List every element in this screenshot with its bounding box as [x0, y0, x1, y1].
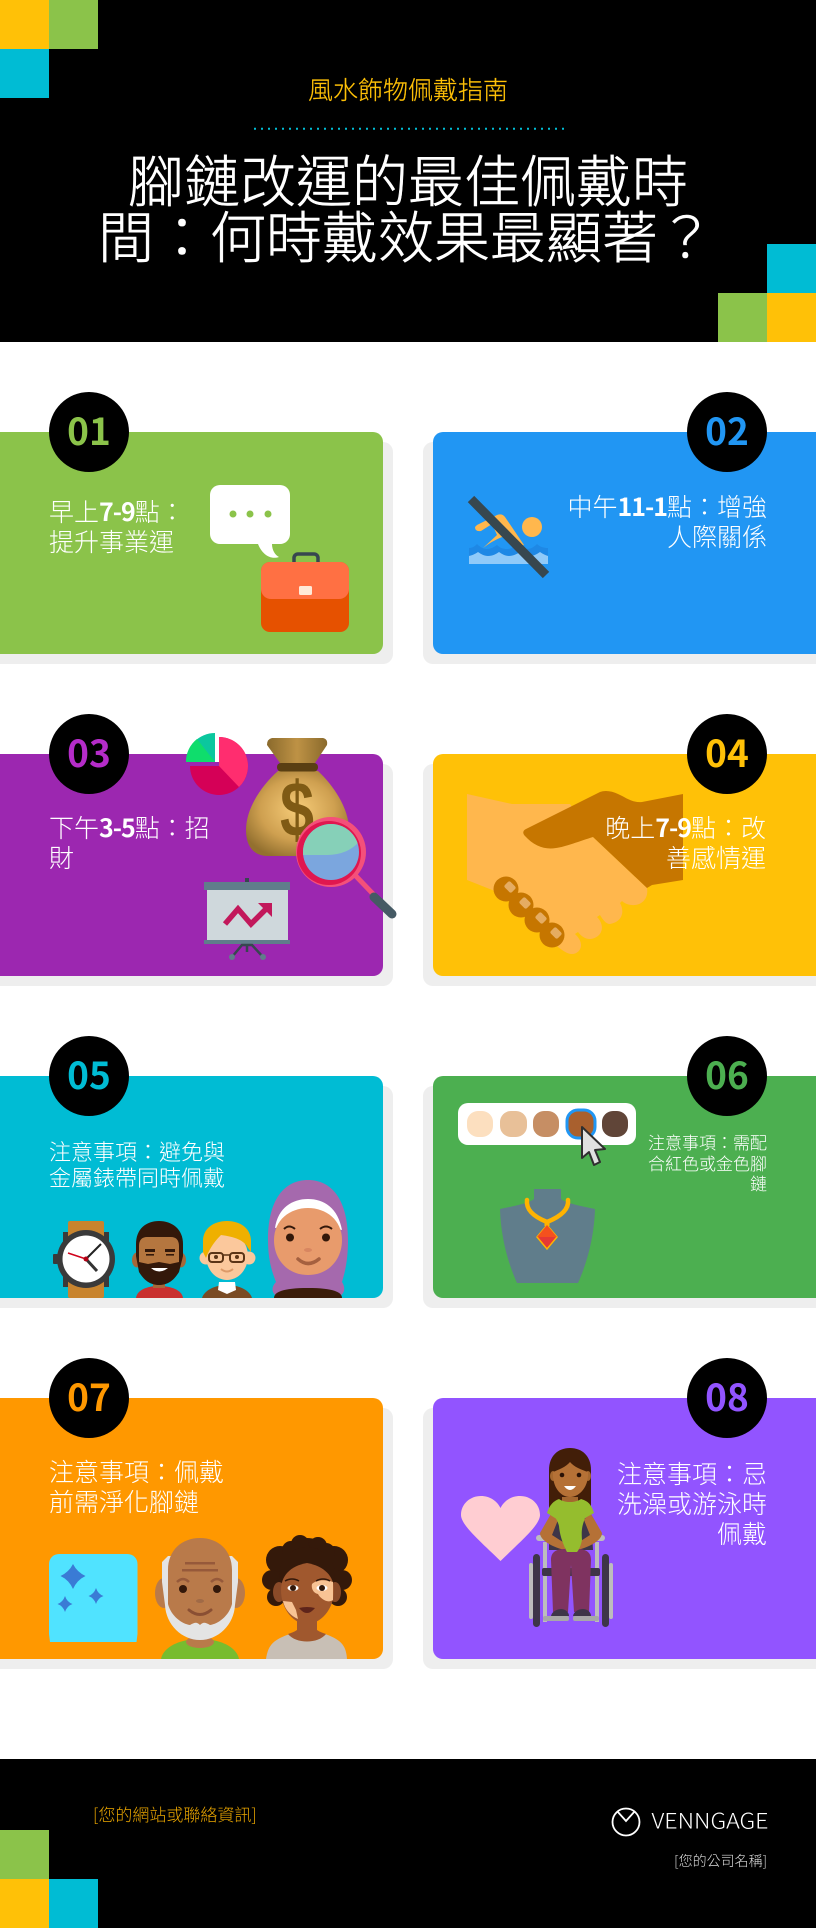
icon: woman in wheelchair: [529, 1448, 613, 1627]
text 06: 注意事項：需配: [648, 1129, 767, 1154]
text 02: [567, 488, 767, 554]
title: 間：何時戴效果最顯著？: [98, 194, 714, 275]
number 07: 07: [67, 1368, 111, 1422]
number 05: 05: [67, 1046, 111, 1100]
text 08: 注意事項：忌: [617, 1455, 767, 1491]
number 08: [687, 1358, 767, 1438]
icon: blond woman: [200, 1221, 256, 1298]
icon: watch: [53, 1221, 115, 1298]
title: [98, 138, 714, 275]
text 04: 晚上7-9點：改: [605, 809, 766, 845]
icon: heart: [461, 1496, 540, 1561]
text 05: [49, 1135, 225, 1193]
icon: necklace on bust: [500, 1189, 595, 1283]
icon: money bag: $: [280, 765, 314, 853]
text 04: 善感情運: [666, 839, 766, 875]
panel 08: [423, 1358, 816, 1669]
text 02: 中午11-1點：增強: [567, 488, 767, 524]
text 07: [49, 1453, 224, 1519]
text 08: 洗澡或游泳時: [617, 1485, 767, 1521]
text 06: [648, 1129, 767, 1195]
panel 02: [423, 392, 816, 664]
number 02: [687, 392, 767, 472]
icon: no swimming: [469, 499, 548, 575]
number 04: 04: [705, 724, 749, 778]
panel 03: [0, 714, 393, 986]
icon: handshake: [467, 791, 683, 954]
icon: cursor: [582, 1127, 605, 1165]
text 07: 前需淨化腳鏈: [49, 1483, 199, 1519]
number 04: [687, 714, 767, 794]
icon: briefcase: [261, 554, 349, 632]
subtitle: 風水飾物佩戴指南: [308, 71, 508, 107]
panel 07: [0, 1358, 393, 1669]
icon: bearded man: [132, 1221, 186, 1298]
icon: elderly man: [155, 1538, 245, 1659]
text 01: [49, 493, 185, 559]
text 07: 注意事項：佩戴: [49, 1453, 224, 1489]
footer contact text: [您的網站或聯絡資訊]: [93, 1801, 257, 1826]
number 06: [687, 1036, 767, 1116]
icon: magnifying glass: [296, 817, 392, 914]
number 05: [49, 1036, 129, 1116]
text 01: 早上7-9點：: [49, 493, 185, 529]
company name: [您的公司名稱]: [674, 1851, 767, 1871]
panel 04: [423, 714, 816, 986]
text 03: 下午3-5點：招: [49, 809, 210, 845]
text 08: 佩戴: [717, 1515, 767, 1551]
icon: curly-haired woman: [262, 1535, 352, 1659]
icon: money bag: [246, 738, 349, 856]
text 06: 鏈: [750, 1170, 767, 1195]
icon: sparkle card: [49, 1554, 138, 1642]
footer band: [0, 1759, 816, 1928]
number 08: 08: [705, 1368, 749, 1422]
panel 01: [0, 392, 393, 664]
number 01: 01: [67, 402, 111, 456]
text 06: 合紅色或金色腳: [648, 1150, 767, 1175]
text 08: [617, 1455, 767, 1551]
text 01: 提升事業運: [49, 523, 174, 559]
number 03: [49, 714, 129, 794]
number 06: 06: [705, 1046, 749, 1100]
icon: presentation board: [204, 878, 290, 960]
number 01: [49, 392, 129, 472]
text 05: 金屬錶帶同時佩戴: [49, 1161, 225, 1193]
venngage logo: [612, 1806, 768, 1836]
text 04: [605, 809, 766, 875]
number 02: 02: [705, 402, 749, 456]
venngage logo: VENNGAGE: [652, 1806, 768, 1836]
icon: speech bubble: [210, 485, 290, 558]
icon: skin tone picker: [458, 1103, 636, 1165]
title: 腳鏈改運的最佳佩戴時: [128, 138, 688, 219]
text 02: 人際關係: [667, 518, 767, 554]
panel 06: [423, 1036, 816, 1308]
icon: woman in hijab: [268, 1180, 348, 1298]
header band: [0, 0, 816, 342]
panel 05: [0, 1036, 393, 1308]
text 03: 財: [49, 839, 74, 875]
text 03: [49, 809, 210, 875]
icon: pie chart: [186, 733, 248, 795]
text 05: 注意事項：避免與: [49, 1135, 225, 1167]
number 03: 03: [67, 724, 111, 778]
number 07: [49, 1358, 129, 1438]
